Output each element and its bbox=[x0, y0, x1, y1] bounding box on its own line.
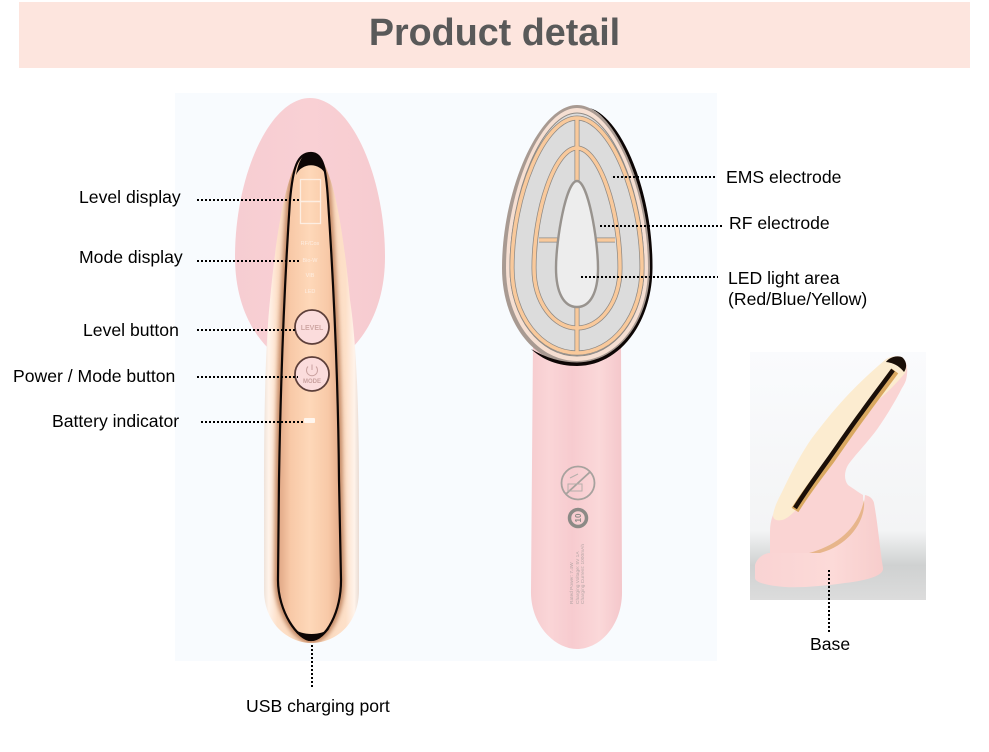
dock base bbox=[755, 495, 883, 587]
rating text bbox=[569, 544, 586, 604]
battery icon bbox=[304, 418, 315, 423]
label: base: Base bbox=[810, 634, 850, 654]
label: LED light area: LED light area bbox=[728, 268, 840, 288]
level display digit bbox=[300, 180, 320, 224]
device on charging base photo bbox=[750, 352, 926, 600]
back view of device bbox=[502, 105, 653, 649]
mode display labels bbox=[301, 241, 320, 295]
mode display labels: VIB bbox=[306, 273, 315, 279]
label: mode display: Mode display bbox=[79, 247, 183, 267]
label: level display: Level display bbox=[79, 187, 181, 207]
power mode button: MODE bbox=[303, 379, 321, 385]
EMS electrode lines bbox=[512, 118, 642, 353]
front view of device bbox=[235, 98, 385, 643]
label: USB charging port: USB charging port bbox=[246, 696, 390, 716]
level button: LEVEL bbox=[301, 325, 324, 332]
rating text: Charging Voltage: 5V 1A bbox=[575, 551, 581, 604]
certification icons bbox=[562, 466, 594, 526]
label: LED light area: (Red/Blue/Yellow) bbox=[728, 289, 867, 309]
power mode button bbox=[295, 357, 329, 391]
callout lines bbox=[197, 177, 829, 688]
gold crescent bbox=[809, 500, 864, 553]
mode display labels: RF/Cos bbox=[301, 241, 320, 247]
label: RF electrode: RF electrode bbox=[729, 213, 830, 233]
device body bbox=[770, 356, 907, 556]
label: EMS electrode: EMS electrode bbox=[726, 167, 841, 187]
label: power mode button: Power / Mode button bbox=[13, 366, 175, 386]
level button bbox=[295, 310, 329, 344]
label: LED light area bbox=[728, 268, 867, 309]
rating text: Charging Current: 1000mAh bbox=[580, 544, 586, 604]
product photo background bbox=[175, 93, 717, 661]
electrode head bbox=[502, 105, 653, 366]
rating text: Rated Power: 7.4W bbox=[569, 562, 575, 604]
LED light area bbox=[556, 181, 598, 307]
gold strip bbox=[773, 356, 906, 520]
title banner: Product detail bbox=[369, 11, 620, 53]
title banner bbox=[19, 2, 970, 68]
mode display labels: LED bbox=[305, 289, 315, 295]
label: battery indicator: Battery indicator bbox=[52, 411, 179, 431]
mode display labels: Bio-W bbox=[303, 258, 318, 264]
label: level button: Level button bbox=[83, 320, 179, 340]
certification icons: 10 bbox=[574, 513, 583, 522]
